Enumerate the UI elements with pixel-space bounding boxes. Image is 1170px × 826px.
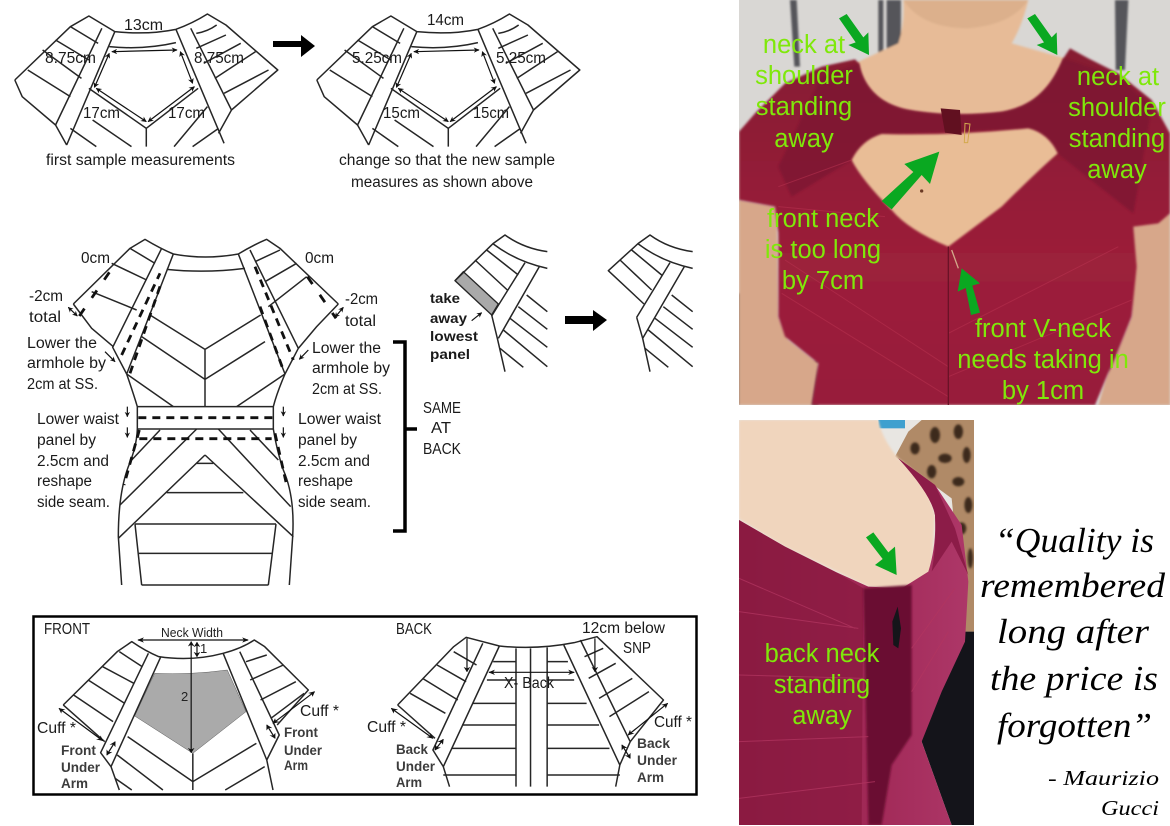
text block: left armhole note: 2cm at SS.	[27, 376, 98, 393]
dress body	[739, 48, 1170, 405]
text block: take away lowest panel: take	[430, 290, 460, 306]
text block: left waist note: 2.5cm and	[37, 453, 109, 470]
label: neck width 14cm: 14cm	[427, 12, 464, 29]
label: back under arm right: Back	[637, 736, 670, 751]
text block: same at back	[423, 400, 462, 458]
annotation: front V-neck: front V-neck	[975, 315, 1111, 343]
annotation: right neck at shoulder: shoulder	[1068, 94, 1166, 122]
caption: first sample: first sample measurements	[46, 152, 235, 169]
label: 12cm below SNP	[582, 620, 666, 657]
shoulder straps shading	[778, 58, 1152, 213]
annotation: front V-neck: by 1cm	[1002, 377, 1084, 405]
label: left lower 15cm: 15cm	[383, 105, 420, 122]
label: right lower 17cm: 17cm	[168, 105, 205, 122]
text block: right waist note: side seam.	[298, 494, 371, 511]
label: back under arm right	[637, 736, 678, 785]
label: back cuff left: Cuff *	[367, 719, 406, 736]
text block: right armhole note: Lower the	[312, 340, 381, 357]
annotation: front neck too long: front neck	[767, 205, 879, 233]
label: front cuff left: Cuff *	[37, 720, 76, 737]
text block: take away lowest panel: away	[430, 310, 467, 326]
icon: green arrow front neck	[882, 152, 939, 209]
photo: dress front fit	[735, 0, 1170, 405]
annotation: left neck at shoulder: shoulder	[755, 62, 853, 90]
neckline cutout	[852, 128, 1058, 247]
text block: left waist note: reshape	[37, 473, 92, 490]
annotation: back neck standing away: away	[792, 702, 852, 730]
label: neck width 13cm: 13cm	[124, 17, 163, 34]
diagram: first sample neck measurements	[15, 14, 278, 169]
text block: left waist note	[37, 411, 120, 511]
annotation: back neck standing away	[765, 640, 880, 730]
text block: right -2cm total: -2cm	[345, 291, 378, 308]
text block: right waist note	[298, 411, 382, 511]
attribution: Maurizio Gucci: Gucci	[1101, 796, 1159, 820]
labels: 0cm right: 0cm	[305, 250, 334, 267]
arrow: first to new sample	[273, 35, 315, 57]
labels: 0cm left: 0cm	[81, 250, 110, 267]
label: x-back: X- Back	[504, 675, 554, 692]
text block: left armhole note: armhole by	[27, 355, 106, 372]
text block: left armhole note: Lower the	[27, 335, 97, 352]
text block: take away lowest panel: lowest	[430, 328, 478, 344]
icon: green arrow right shoulder	[1027, 14, 1057, 55]
label: neck width: Neck Width	[161, 625, 223, 640]
text block: same at back: SAME	[423, 400, 461, 417]
text block: same at back: BACK	[423, 441, 462, 458]
annotation: right neck at shoulder: standing	[1069, 125, 1165, 153]
text block: right armhole note: armhole by	[312, 360, 390, 377]
diagram: sleeve with lowest panel removed	[430, 235, 547, 372]
text block: take away lowest panel	[430, 290, 478, 362]
label: front under arm left: Under	[61, 760, 101, 775]
bracket: same at back	[393, 342, 417, 531]
annotation: front V-neck	[957, 315, 1129, 405]
label: back under arm left: Arm	[396, 775, 422, 790]
label: back under arm right: Arm	[637, 770, 664, 785]
label: back under arm left	[396, 742, 436, 790]
label: back under arm right: Under	[637, 753, 678, 768]
text block: left -2cm total: total	[29, 309, 61, 326]
label: left lower 17cm: 17cm	[83, 105, 120, 122]
label: measure 1: 1	[200, 641, 207, 656]
label: front under arm left: Arm	[61, 776, 88, 791]
icon: green arrow V-neck	[958, 268, 980, 315]
text block: right waist note: reshape	[298, 473, 353, 490]
annotation: left neck at shoulder	[755, 31, 853, 153]
attribution: Maurizio Gucci: - Maurizio	[1048, 766, 1159, 790]
annotation: left neck at shoulder: standing	[756, 93, 852, 121]
label: front under arm right: Under	[284, 743, 323, 758]
label: measure 2: 2	[181, 689, 188, 704]
annotation: front neck too long	[765, 205, 881, 295]
quote: Maurizio Gucci quotation: forgotten”	[997, 706, 1152, 745]
label: left shoulder 5.25cm: 5.25cm	[352, 50, 402, 67]
annotation: right neck at shoulder	[1068, 63, 1166, 184]
text block: take away lowest panel: panel	[430, 346, 470, 362]
label: front under arm right	[284, 725, 323, 773]
annotation: front V-neck: needs taking in	[957, 346, 1129, 374]
panel: front and back measurement guide	[34, 616, 696, 794]
label: right shoulder 5.25cm: 5.25cm	[496, 50, 546, 67]
caption: change line one: change so that the new sample	[339, 152, 555, 169]
text block: left waist note: panel by	[37, 432, 96, 449]
quote: Maurizio Gucci quotation: “Quality is	[995, 521, 1154, 560]
text block: left waist note: side seam.	[37, 494, 110, 511]
text block: left -2cm total: -2cm	[29, 288, 63, 305]
label: left shoulder 8.75cm: 8.75cm	[45, 50, 96, 67]
text block: left -2cm total	[29, 288, 63, 326]
arrow: sleeve before to after	[565, 310, 607, 331]
annotation: left neck at shoulder: neck at	[763, 31, 845, 59]
front bodice drawing	[59, 640, 315, 790]
annotation: right neck at shoulder: away	[1087, 156, 1147, 184]
heading: front: FRONT	[44, 621, 90, 638]
quote: Maurizio Gucci quotation: remembered	[980, 566, 1166, 605]
text block: right -2cm total: total	[345, 313, 376, 330]
annotation: left neck at shoulder: away	[774, 125, 834, 153]
annotation: right neck at shoulder: neck at	[1077, 63, 1159, 91]
label: 12cm below SNP: SNP	[623, 640, 651, 657]
annotation: back neck standing away: standing	[774, 671, 870, 699]
label: back under arm left: Under	[396, 759, 436, 774]
text block: right armhole note: 2cm at SS.	[312, 381, 382, 398]
icon: green arrow back neck	[866, 532, 897, 575]
label: 12cm below SNP: 12cm below	[582, 620, 666, 637]
annotation: front neck too long: is too long	[765, 236, 881, 264]
label: front under arm right: Arm	[284, 758, 308, 773]
text block: right waist note: panel by	[298, 432, 357, 449]
quote: Maurizio Gucci quotation: the price is	[990, 659, 1158, 698]
text block: left waist note: Lower waist	[37, 411, 120, 428]
photo: back neck fit	[739, 420, 974, 825]
text block: left armhole note	[27, 335, 106, 393]
quote: Maurizio Gucci quotation: long after	[997, 612, 1149, 651]
diagram: new sample neck measurements	[317, 12, 580, 191]
icon: green arrow left shoulder	[839, 14, 869, 55]
quote: Maurizio Gucci quotation	[980, 521, 1166, 745]
label: back cuff right: Cuff *	[654, 714, 692, 731]
heading: back: BACK	[396, 621, 433, 638]
label: front cuff right: Cuff *	[300, 703, 339, 720]
label: back under arm left: Back	[396, 742, 428, 757]
annotation: back neck standing away: back neck	[765, 640, 880, 668]
back bodice drawing	[391, 637, 668, 787]
caption: change line two: measures as shown above	[351, 174, 533, 191]
label: right shoulder 8.75cm: 8.75cm	[194, 50, 244, 67]
annotation: front neck too long: by 7cm	[782, 267, 864, 295]
text block: same at back: AT	[431, 420, 452, 437]
label: front under arm right: Front	[284, 725, 318, 740]
text block: right -2cm total	[345, 291, 378, 330]
label: front under arm left: Front	[61, 743, 96, 758]
text block: right waist note: Lower waist	[298, 411, 382, 428]
text block: right armhole note	[312, 340, 390, 398]
label: front under arm left	[61, 743, 101, 791]
label: right lower 15cm: 15cm	[473, 105, 509, 122]
attribution: Maurizio Gucci	[1048, 766, 1159, 820]
text block: right waist note: 2.5cm and	[298, 453, 370, 470]
diagram: dress front with alterations	[27, 239, 390, 585]
diagram: sleeve after change	[608, 235, 693, 372]
